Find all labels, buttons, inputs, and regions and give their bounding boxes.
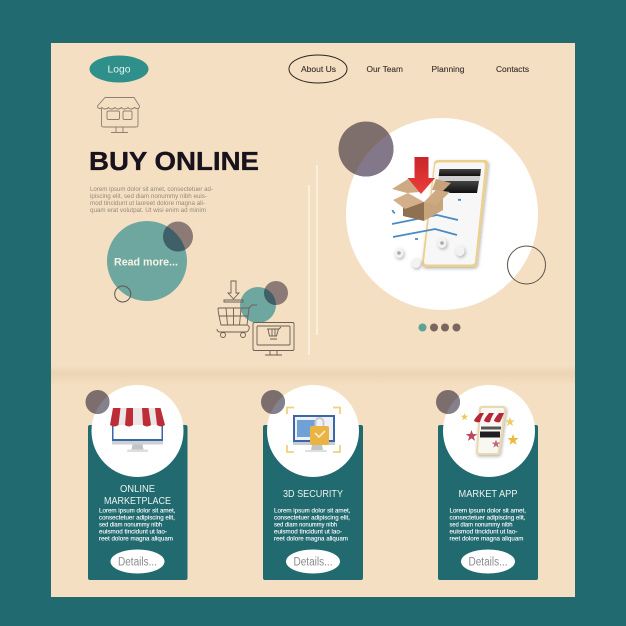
card text: consectetuer adipiscing elit,: [274, 514, 350, 522]
logo: [90, 56, 148, 82]
intro text: [90, 186, 213, 214]
card: market app: [436, 385, 538, 580]
card text: euismod tincidunt ut lao-: [450, 528, 518, 536]
icon: red down arrow: [408, 157, 435, 194]
details button: [286, 550, 340, 574]
details button: [110, 550, 164, 574]
card: online marketplace: [86, 385, 188, 580]
details button: Details...: [118, 556, 157, 568]
card text: [450, 508, 526, 542]
pagination dots: [418, 324, 460, 332]
card title: 3D SECURITY: [283, 488, 343, 500]
card text: sed diam nonummy nibh: [274, 522, 337, 528]
read more button: [107, 221, 193, 302]
icon: secure monitor: [287, 408, 340, 452]
card text: consectetuer adipiscing elit,: [99, 514, 175, 522]
logo: Logo: [108, 64, 131, 76]
card: online marketplace: MARKETPLACE: [104, 495, 171, 507]
card text: reet dolore magna aliquam: [99, 536, 173, 542]
icon: storefront monitor: [110, 408, 165, 452]
navigation: About Us: [301, 64, 336, 74]
card text: [274, 508, 351, 542]
gray circle: [338, 122, 394, 176]
card text: euismod tincidunt ut lao-: [99, 528, 167, 536]
icon: blue lines: [392, 200, 461, 239]
intro text: mod tincidunt ut laoreet dolore magna ali-: [90, 200, 205, 207]
card text: sed diam nonummy nibh: [99, 522, 162, 528]
card text: consectetuer adipiscing elit,: [450, 514, 526, 522]
card text: Lorem ipsum dolor sit amet,: [99, 508, 176, 514]
decorative vertical lines: [309, 165, 317, 355]
card: 3d security: [261, 385, 363, 580]
card text: Lorem ipsum dolor sit amet,: [274, 508, 351, 514]
intro text: quam erat volutpat. Ut wisi enim ad minim: [90, 207, 206, 214]
icon: phone shop with stars: [461, 406, 519, 455]
read more button: Read more...: [114, 256, 178, 268]
card text: sed diam nonummy nibh: [450, 522, 513, 528]
outline circle: [508, 246, 546, 284]
details button: [461, 550, 515, 574]
title: BUY ONLINE: [89, 148, 259, 176]
icon group: shopping cart and monitor: [217, 281, 294, 355]
icon: round buttons: [394, 238, 464, 268]
navigation: Contacts: [496, 64, 529, 74]
card text: euismod tincidunt ut lao-: [274, 528, 342, 536]
navigation: [289, 55, 529, 83]
intro text: ipiscing elit, sed diam nonummy nibh euis-: [90, 193, 207, 200]
icon: cardboard box: [392, 179, 451, 221]
navigation: Planning: [432, 64, 465, 74]
card text: reet dolore magna aliquam: [274, 536, 348, 542]
card title: ONLINE: [120, 483, 155, 495]
icon: shop monitor: [98, 98, 140, 132]
details button: Details...: [468, 556, 508, 568]
navigation: Our Team: [366, 64, 403, 74]
icon: phone: [422, 160, 488, 267]
intro text: Lorem ipsum dolor sit amet, consectetuer ad-: [90, 186, 213, 193]
hero illustration: [346, 118, 538, 310]
details button: Details...: [294, 556, 332, 568]
card text: [99, 508, 176, 542]
page panel: [51, 43, 575, 597]
card text: Lorem ipsum dolor sit amet,: [450, 508, 526, 514]
card text: reet dolore magna aliquam: [450, 536, 524, 542]
card title: MARKET APP: [458, 488, 518, 500]
